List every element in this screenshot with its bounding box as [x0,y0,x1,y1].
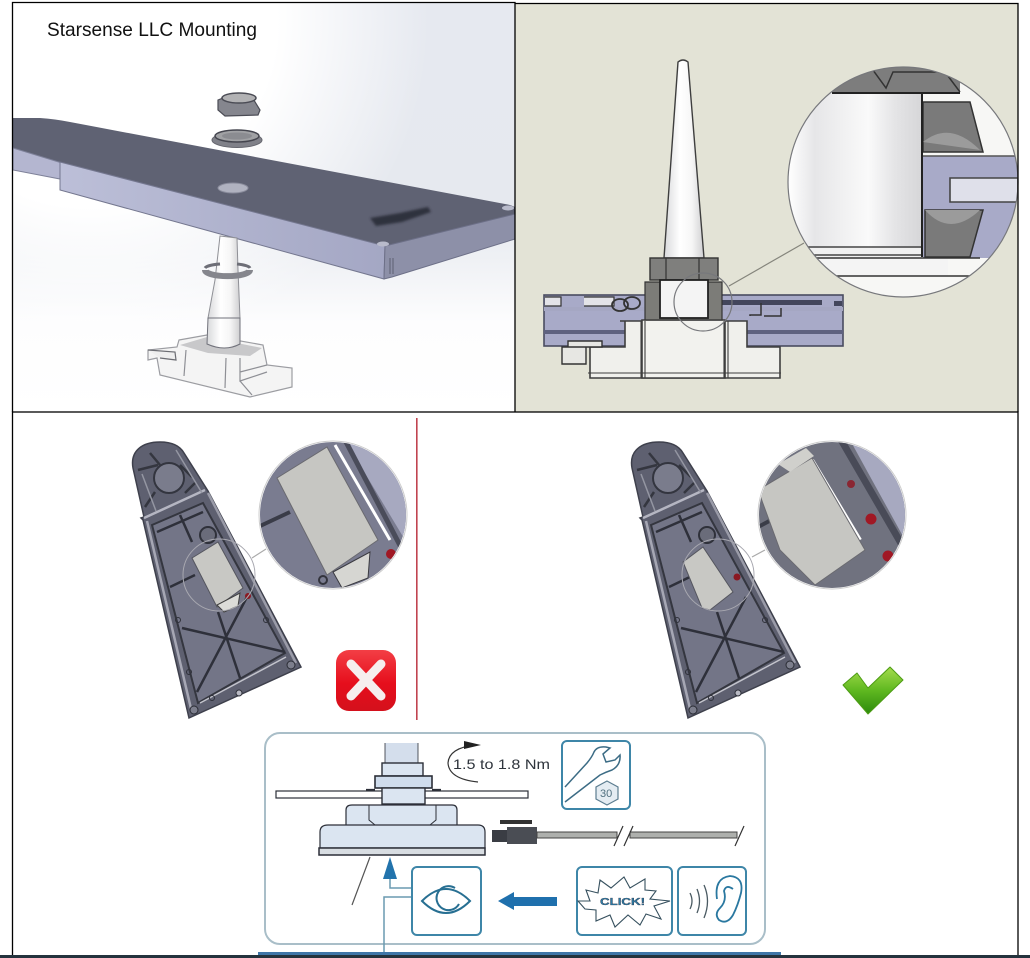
blue base line [258,952,781,955]
icon: ear [678,867,746,935]
leader [252,549,266,558]
icon: click: CLICK! [600,896,645,908]
divider: red line [416,418,418,720]
panel: exploded mounting view [13,3,515,412]
plate marking [370,207,431,226]
plate side faces [13,148,515,279]
panel: incorrect orientation [133,435,411,718]
plate hole [218,183,248,193]
blue up arrow and lines [383,857,412,952]
nut and washer section [612,258,722,320]
plate cross-section [544,295,843,346]
icon: eye [412,867,481,935]
icon: green check [843,667,903,714]
module [683,547,733,610]
plate top surface [13,118,515,246]
red mark [734,574,740,580]
detail circle [183,539,255,611]
nut [218,93,260,116]
panel: installation diagram [265,733,765,952]
antenna spire [664,60,704,258]
module [192,542,243,607]
cable connector [492,820,744,846]
antenna stud and base [148,236,292,397]
magnified view [258,440,408,590]
icon: red cross [336,650,396,711]
panel borders [12,2,1018,412]
leader line [352,857,370,905]
leader line [729,243,804,286]
leader [752,550,765,557]
red mark [245,593,251,599]
icon: wrench 30: 30 [600,788,612,800]
title: Starsense LLC Mounting [47,19,257,41]
icon: click [577,867,672,935]
lower body [562,320,781,378]
icon: wrench 30 [562,741,630,809]
detail circle [682,539,754,611]
torque label: 1.5 to 1.8 Nm [453,756,550,772]
panel: lower frame [12,412,1018,957]
panel: correct orientation [632,435,908,718]
housing drawing [133,442,301,718]
magnified detail [788,65,1030,297]
rotation arrow [448,741,481,782]
blue left arrow [498,892,557,910]
dark bottom bar [0,955,1030,958]
antenna mount [276,743,528,855]
washer [212,130,262,148]
connector [217,593,240,612]
detail circle small [674,273,732,331]
magnified view [758,435,908,595]
housing drawing [632,442,800,718]
